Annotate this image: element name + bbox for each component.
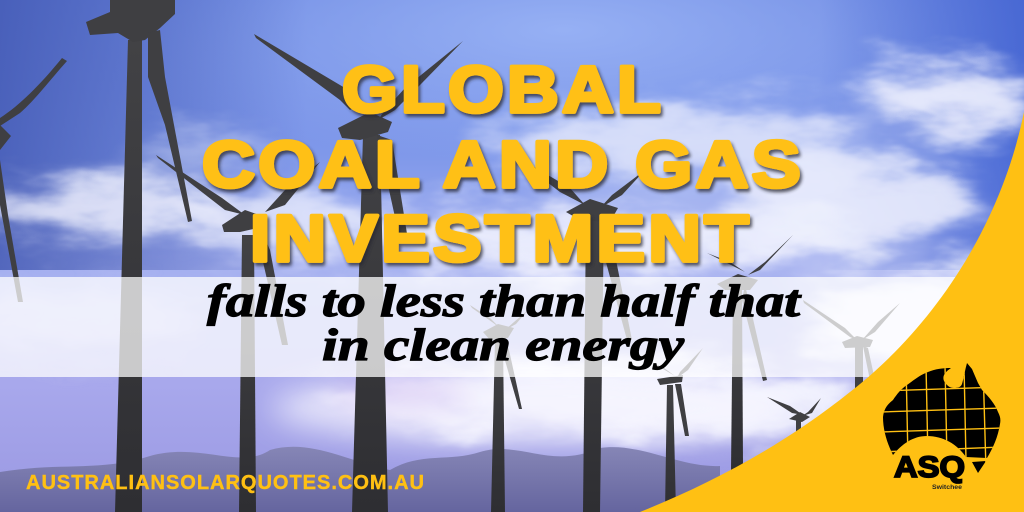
turbine tall left (86, 0, 192, 512)
subtitle line 1: falls to less than half that (207, 275, 801, 326)
subtitle (207, 275, 801, 370)
yellow corner swoosh (640, 112, 1024, 512)
website url: AUSTRALIANSOLARQUOTES.COM.AU (26, 472, 424, 494)
turbine small near (653, 348, 703, 512)
clouds (0, 66, 1024, 444)
logo wordmark: ASQ (894, 451, 965, 484)
mountains (0, 447, 720, 512)
turbine far left (0, 58, 67, 302)
turbine tiny (767, 397, 821, 432)
translucent white band (0, 277, 1024, 377)
turbine mid left (156, 155, 320, 512)
turbine center left (254, 34, 463, 512)
turbine far right (803, 300, 900, 400)
title line 2: COAL AND GAS (202, 127, 804, 201)
turbine right (707, 235, 793, 470)
turbine middle small (470, 305, 528, 512)
low glow behind horizon (270, 374, 810, 442)
logo (880, 360, 1005, 491)
turbine center right (505, 150, 645, 512)
logo sub-brand: Switchee (932, 484, 962, 491)
icon: Australia solar grid (883, 363, 1000, 473)
title line 1: GLOBAL (342, 52, 664, 126)
title (202, 52, 804, 275)
title line 3: INVESTMENT (250, 201, 752, 275)
subtitle line 2: in clean energy (322, 319, 685, 370)
